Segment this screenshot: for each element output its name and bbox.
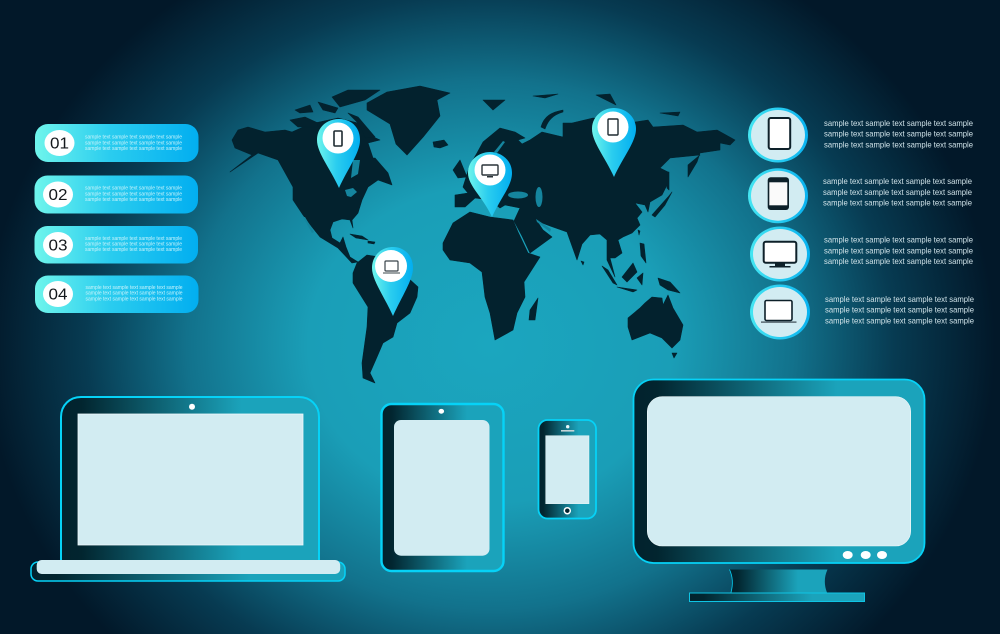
North America <box>230 118 392 263</box>
item 04: sample text sample text sample text sample <box>86 285 183 291</box>
legend: monitor: sample text sample text sample text sample <box>824 256 973 266</box>
item 03: sample text sample text sample text sample <box>85 242 182 248</box>
inland seas <box>303 141 551 233</box>
legend: monitor <box>750 226 973 282</box>
item 03: sample text sample text sample text sample <box>85 247 182 253</box>
map pin: phone over North America <box>317 119 360 188</box>
legend: tablet: sample text sample text sample text sample <box>824 118 973 128</box>
legend: phone <box>748 168 972 223</box>
legend: tablet: sample text sample text sample text sample <box>824 140 973 150</box>
device legend panel <box>748 108 974 340</box>
legend: laptop: sample text sample text sample text sample <box>825 294 974 304</box>
legend: tablet <box>748 108 973 162</box>
item 01: sample text sample text sample text sample <box>85 135 182 141</box>
Arctic islands <box>290 90 448 148</box>
tablet device <box>382 404 504 571</box>
Caribbean islands <box>350 234 375 244</box>
legend: monitor: sample text sample text sample text sample <box>824 246 973 256</box>
item 02 <box>34 176 198 214</box>
legend: laptop: sample text sample text sample text sample <box>825 304 974 314</box>
item 02: sample text sample text sample text sample <box>85 197 182 203</box>
map pin: laptop over South America <box>372 247 413 316</box>
item 03: 03 <box>48 238 68 254</box>
item 04: sample text sample text sample text sample <box>86 296 183 302</box>
Africa <box>443 212 540 340</box>
item 02: sample text sample text sample text sample <box>85 186 182 192</box>
item 04: 04 <box>48 286 68 304</box>
item 01: sample text sample text sample text sample <box>85 140 182 146</box>
world map <box>230 86 735 383</box>
legend: monitor: sample text sample text sample text sample <box>824 234 973 244</box>
map pin: tablet over Russia <box>592 108 636 177</box>
Greenland <box>367 86 450 155</box>
legend: tablet: sample text sample text sample text sample <box>824 129 973 139</box>
legend: phone: sample text sample text sample text sample <box>823 198 972 208</box>
South America <box>353 255 418 383</box>
Eurasia <box>455 118 735 277</box>
laptop device <box>31 397 345 581</box>
item 01: sample text sample text sample text sample <box>85 146 182 152</box>
legend: laptop: sample text sample text sample text sample <box>825 316 974 326</box>
phone device <box>538 420 596 518</box>
legend: phone: sample text sample text sample text sample <box>823 187 972 197</box>
map pin: monitor over Europe <box>468 152 512 217</box>
legend: laptop <box>750 284 974 340</box>
item 04 <box>35 276 198 313</box>
item 01 <box>35 124 198 162</box>
Madagascar <box>529 298 538 320</box>
numbered list panel <box>34 124 198 313</box>
item 02: 02 <box>48 187 68 204</box>
item 01: 01 <box>50 136 69 152</box>
item 03: sample text sample text sample text sample <box>85 236 182 242</box>
item 04: sample text sample text sample text sample <box>86 291 183 297</box>
item 02: sample text sample text sample text sample <box>85 192 182 198</box>
item 03 <box>34 226 198 264</box>
legend: phone: sample text sample text sample text sample <box>823 176 972 186</box>
monitor device <box>634 380 924 602</box>
Asian and Pacific islands <box>453 94 680 358</box>
Australia <box>628 295 683 348</box>
